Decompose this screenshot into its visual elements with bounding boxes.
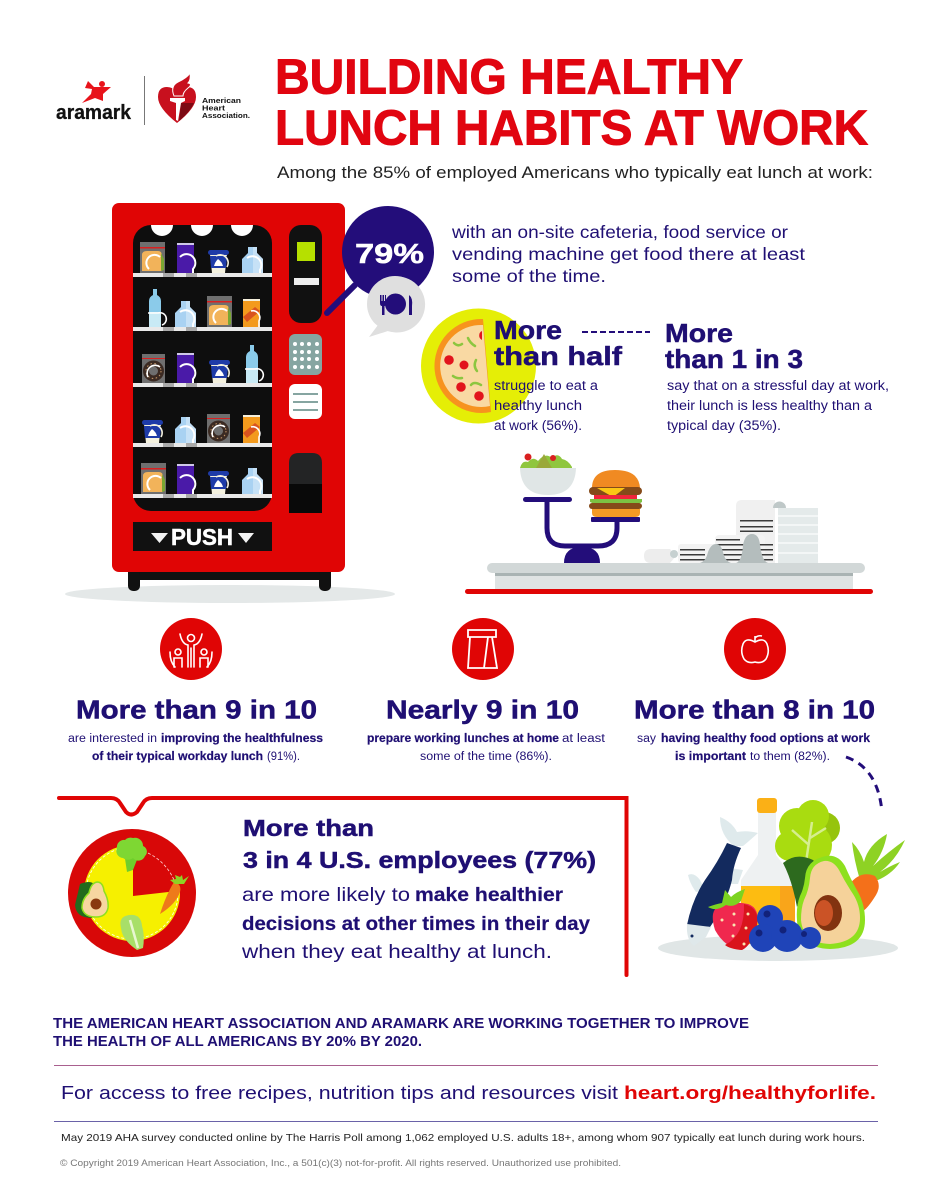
- stat: nearly 9 in 10: at least: [562, 733, 606, 745]
- vending machine: [65, 203, 395, 603]
- stat: nearly 9 in 10: Nearly 9 in 10: [386, 694, 579, 724]
- title: [275, 50, 868, 156]
- text: more than 3 in 4: More than: [243, 815, 374, 841]
- stat: nearly 9 in 10: prepare working lunches at home: [367, 733, 559, 745]
- divider line: [54, 1121, 878, 1122]
- stat: more than half: at work (56%).: [494, 418, 582, 433]
- text: more than 3 in 4: make healthier: [415, 884, 563, 906]
- title: LUNCH HABITS AT WORK: [275, 102, 868, 156]
- logo: American Heart Association: Heart: [202, 104, 226, 112]
- stat: nearly 9 in 10: [367, 694, 606, 763]
- stat: more than half: More: [494, 315, 562, 345]
- icon: apple: [724, 618, 786, 680]
- callout: 79%: 79%: [355, 238, 424, 269]
- stat: more than 8 in 10: More than 8 in 10: [634, 694, 875, 724]
- divider line: [54, 1065, 878, 1066]
- stat: more than 1 in 3: typical day (35%).: [667, 418, 781, 433]
- stat: more than 9 in 10: [68, 694, 323, 763]
- counter red line: [465, 589, 873, 594]
- resources call to action: heart.org/healthyforlife.: [624, 1082, 876, 1103]
- icon: avocado: [797, 856, 865, 949]
- icon: pizza: [421, 308, 536, 424]
- icon: broccoli: [116, 838, 147, 872]
- logo: American Heart Association: Association.: [202, 111, 250, 120]
- text: on-site cafeteria: some of the time.: [452, 266, 606, 286]
- text: more than 3 in 4: are more likely to: [242, 884, 410, 906]
- icon: burger: [589, 470, 642, 517]
- dashed arrow: [846, 757, 882, 812]
- icon: plate and cutlery: [367, 276, 425, 337]
- text: on-site cafeteria: [451, 222, 805, 286]
- icon: strawberry: [708, 889, 758, 950]
- stat: more than 8 in 10: say: [637, 733, 656, 745]
- vending window: [133, 225, 272, 511]
- logo: American Heart Association: [144, 73, 250, 125]
- partnership statement: THE HEALTH OF ALL AMERICANS BY 20% BY 2020.: [53, 1034, 422, 1050]
- stat: more than 9 in 10: of their typical workday lunch: [92, 751, 263, 763]
- resources call to action: For access to free recipes, nutrition tips and resources visit: [61, 1082, 618, 1103]
- panel: healthy lunch callout frame: [59, 798, 626, 975]
- stat: more than 8 in 10: having healthy food options at work: [661, 733, 871, 745]
- subtitle: Among the 85% of employed Americans who typically eat lunch at work:: [277, 163, 873, 182]
- icon: carrot: [160, 875, 189, 914]
- logo: Aramark: aramark: [56, 102, 132, 124]
- stat: more than 1 in 3: their lunch is less healthy than a: [667, 398, 873, 413]
- counter with paperwork: [487, 500, 865, 590]
- stat: more than 1 in 3: [665, 318, 889, 433]
- stat: more than 9 in 10: improving the healthfulness: [161, 733, 323, 745]
- logo: Aramark: [56, 81, 132, 124]
- logo: American Heart Association: American: [202, 96, 241, 105]
- text: more than 3 in 4: decisions at other times in their day: [242, 913, 590, 935]
- card slot: [289, 384, 322, 419]
- collection tray: [289, 453, 322, 513]
- stat: more than half: [494, 315, 622, 433]
- icon: people: [160, 618, 222, 680]
- push panel: PUSH: [171, 524, 233, 550]
- resources call to action: [61, 1082, 876, 1103]
- control panel: [289, 225, 322, 323]
- icon: avocado: [75, 882, 108, 918]
- survey source note: May 2019 AHA survey conducted online by The Harris Poll among 1,062 employed U.S. adults 18+, among whom 907 typically eat lunch during work hours.: [61, 1132, 865, 1144]
- icon: lettuce: [120, 915, 144, 950]
- text: more than 3 in 4: [241, 815, 596, 963]
- connector: dashed line: [582, 331, 650, 333]
- push panel: [133, 522, 272, 551]
- stat: more than half: healthy lunch: [494, 398, 582, 413]
- scale: salad vs burger: [520, 454, 642, 563]
- stat: more than 1 in 3: More: [665, 318, 733, 348]
- text: more than 3 in 4: when they eat healthy at lunch.: [241, 941, 552, 963]
- stat: nearly 9 in 10: some of the time (86%).: [420, 751, 552, 763]
- icon: carrot: [849, 834, 905, 911]
- icon: salad bowl: [520, 454, 576, 495]
- stat: more than 1 in 3: say that on a stressful day at work,: [667, 378, 889, 393]
- icon: oil bottle: [741, 798, 795, 950]
- icon: lunch bag: [452, 618, 514, 680]
- stat: more than 8 in 10: is important: [675, 751, 746, 763]
- title: BUILDING HEALTHY: [275, 50, 743, 104]
- stat: more than 1 in 3: than 1 in 3: [665, 344, 803, 374]
- stat: more than 9 in 10: More than 9 in 10: [76, 694, 317, 724]
- icon: plate with vegetables: [68, 829, 196, 957]
- paper stack: [644, 500, 818, 563]
- stat: more than 9 in 10: are interested in: [68, 733, 157, 745]
- stat: more than 9 in 10: (91%).: [267, 751, 300, 763]
- text: on-site cafeteria: vending machine get food there at least: [452, 244, 805, 264]
- keypad: [289, 334, 322, 375]
- stat: more than half: struggle to eat a: [494, 378, 599, 393]
- stat: more than half: than half: [494, 341, 622, 371]
- partnership statement: [53, 1016, 749, 1050]
- text: on-site cafeteria: with an on-site cafeteria, food service or: [451, 222, 788, 242]
- stat: more than 8 in 10: to them (82%).: [750, 751, 830, 763]
- icon: blueberries: [749, 905, 821, 952]
- text: more than 3 in 4: 3 in 4 U.S. employees (77%): [243, 847, 596, 873]
- stat: more than 8 in 10: [634, 694, 875, 763]
- icon: fish: [687, 817, 758, 946]
- copyright: © Copyright 2019 American Heart Association, Inc., a 501(c)(3) not-for-profit. All rights reserved. Unauthorized use prohibited.: [60, 1158, 621, 1168]
- icon: lettuce: [775, 800, 840, 907]
- partnership statement: THE AMERICAN HEART ASSOCIATION AND ARAMARK ARE WORKING TOGETHER TO IMPROVE: [53, 1016, 749, 1032]
- callout: 79%: [327, 206, 434, 337]
- food group: [658, 798, 905, 961]
